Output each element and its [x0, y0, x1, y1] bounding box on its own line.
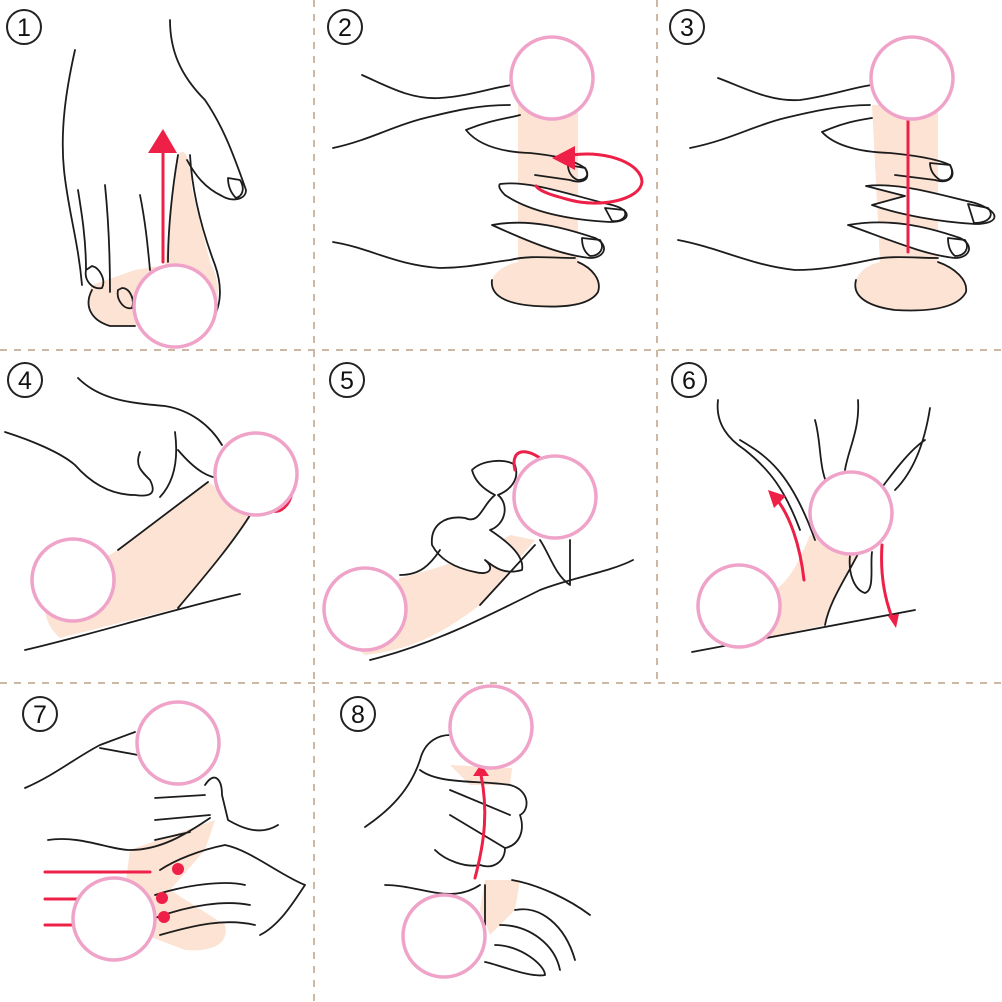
step 4 red arrow [270, 492, 292, 511]
step 2 lower fingers [499, 183, 627, 222]
panel: step 5 [324, 363, 633, 660]
step 2 number: 2 [338, 14, 352, 42]
step 3 third finger [848, 222, 969, 258]
step 8 red arrow [473, 764, 489, 878]
step 1 circle [134, 265, 216, 347]
step 3 nails and base [678, 163, 991, 310]
step 8 circles [403, 686, 532, 977]
step 1 red arrow [148, 129, 177, 262]
step 5 body lines [370, 540, 633, 660]
step 6 number [672, 363, 706, 397]
step 6 circles [698, 472, 892, 647]
step 7 shape [120, 820, 226, 950]
step 4 number: 4 [18, 367, 32, 395]
step 6 hands outline [692, 400, 930, 652]
step 2 third finger [492, 223, 604, 258]
step 2 hands outline [333, 75, 587, 182]
step 6 number: 6 [682, 367, 696, 395]
step 5 shape [345, 535, 535, 655]
step 1 number [7, 10, 41, 44]
step 7 number: 7 [33, 701, 47, 729]
panel: step 2 [328, 10, 642, 307]
step 8 hands outline [365, 735, 590, 975]
step 7 number [23, 697, 57, 731]
step 4 shape [45, 482, 252, 638]
panel: step 6 [672, 363, 930, 652]
step 3 red line [906, 118, 910, 252]
step 2 red arrow [536, 146, 642, 203]
step 8 number: 8 [351, 701, 365, 729]
step 7 circles [73, 702, 219, 960]
panel: step 7 [23, 697, 305, 960]
step 1 hand outline [63, 20, 246, 326]
panel: step 4 [5, 363, 297, 650]
step 2 circle [511, 37, 593, 119]
step 6 shape [713, 535, 860, 645]
panel: step 1 [7, 10, 246, 347]
step 2 nails and base [333, 165, 625, 307]
step 5 red arrow [514, 452, 545, 470]
step 1 number: 1 [17, 14, 31, 42]
step 3 circle [871, 37, 953, 119]
step 7 red lines and dots [45, 863, 184, 925]
step 5 number: 5 [340, 367, 354, 395]
step 1 shape [89, 152, 218, 326]
step 5 hand outline [432, 461, 522, 573]
panel: step 3 [670, 10, 995, 310]
step 4 hand outline [5, 378, 252, 650]
step 3 shape [855, 105, 966, 310]
step 5 circles [324, 456, 596, 650]
step 7 hands outline [25, 732, 305, 935]
step 8 number [341, 697, 375, 731]
step 4 number [8, 363, 42, 397]
step 2 number [328, 10, 362, 44]
panel: step 8 [341, 686, 590, 977]
step 4 circles [32, 433, 297, 621]
step 8 shape [450, 765, 520, 935]
step 6 red arrows [768, 490, 899, 628]
step 3 hands outline [690, 78, 952, 181]
step 3 number [670, 10, 704, 44]
step 3 middle finger [866, 185, 995, 224]
step 3 number: 3 [680, 14, 694, 42]
step 2 shape [492, 105, 599, 307]
step 5 number [330, 363, 364, 397]
